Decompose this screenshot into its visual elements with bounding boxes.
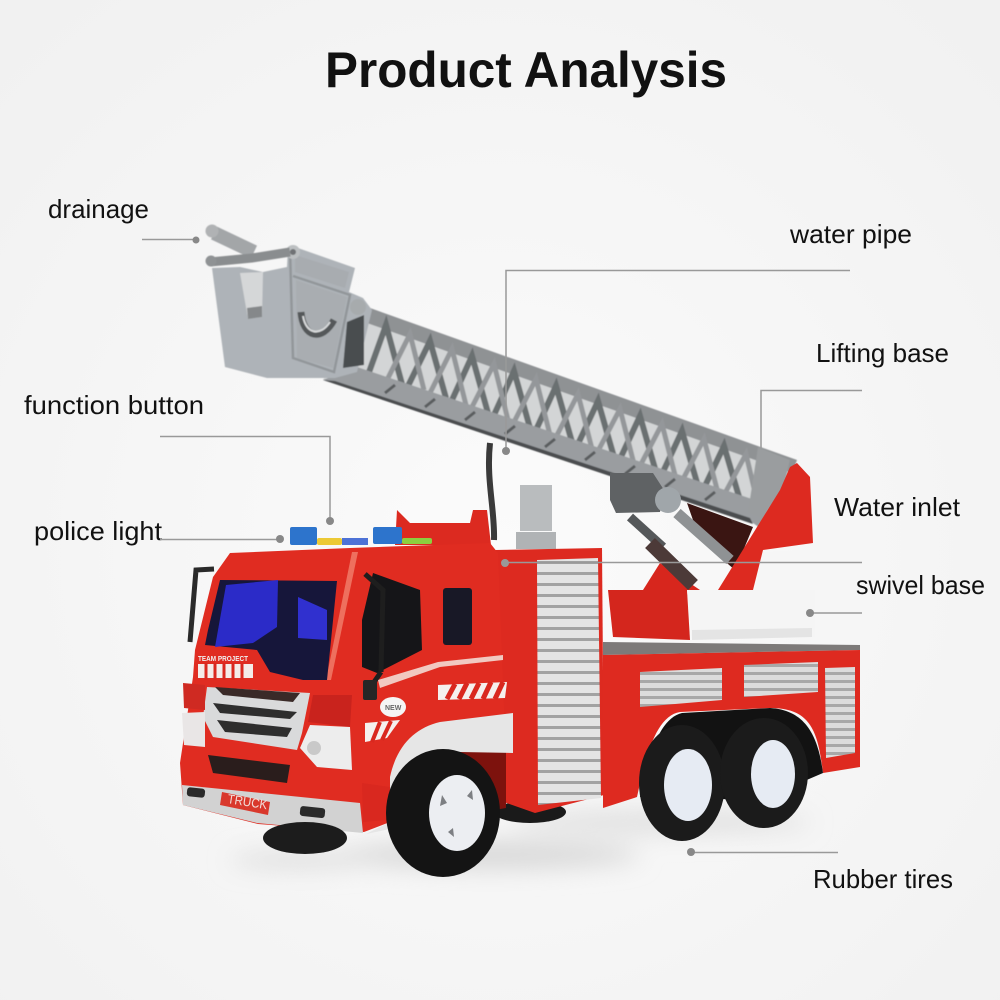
hazard stripes [438, 682, 507, 700]
front hazard [365, 720, 400, 742]
label: Rubber tires: Rubber tires [813, 864, 953, 894]
lights [183, 683, 205, 710]
label: Water inlet [501, 492, 961, 567]
basket [212, 245, 372, 378]
front tires [263, 749, 500, 877]
label: police light: police light [34, 516, 163, 546]
water hose [489, 443, 494, 540]
door window [362, 573, 422, 673]
new badge: NEW [385, 705, 402, 712]
silver pipe [516, 485, 556, 549]
team project badge [198, 656, 253, 680]
team project badge: TEAM PROJECT [198, 656, 249, 663]
label: function button: function button [24, 390, 204, 420]
roof marker [395, 510, 491, 545]
door stripe [378, 655, 503, 688]
lift cylinders [630, 517, 663, 547]
label: Rubber tires [687, 848, 953, 894]
grille [203, 687, 310, 750]
title: Product Analysis [325, 42, 727, 98]
label: Lifting base: Lifting base [816, 338, 949, 368]
label: Water inlet: Water inlet [834, 492, 961, 522]
basket crescent [301, 312, 334, 334]
ladder arm [206, 224, 797, 528]
label: function button [24, 390, 334, 525]
wheel arch [366, 713, 513, 834]
police light bar [290, 527, 432, 545]
mirror [365, 574, 383, 685]
label: water pipe: water pipe [789, 219, 912, 249]
rear tires [494, 718, 808, 841]
bumper [182, 785, 363, 833]
label: police light [34, 516, 284, 546]
label: water pipe [502, 219, 912, 455]
ladder truss [323, 308, 797, 528]
truck label: TRUCK [227, 791, 269, 812]
rear window [443, 588, 472, 645]
lower vent [208, 755, 290, 783]
ladder end bracket [748, 447, 790, 518]
lift arm and swivel base [608, 463, 830, 640]
label: swivel base: swivel base [856, 570, 985, 600]
under-arch shadow [400, 752, 506, 827]
label: swivel base [806, 570, 985, 617]
ground shadow [230, 810, 810, 869]
water nozzle [206, 224, 290, 266]
side mirror front [190, 569, 214, 642]
label: drainage [48, 194, 200, 244]
label: Lifting base [761, 338, 949, 448]
windscreen [205, 580, 337, 680]
cab [180, 510, 513, 834]
new badge [380, 697, 406, 717]
label: drainage: drainage [48, 194, 149, 224]
truck body tower [495, 548, 604, 813]
truck rear bed [603, 642, 860, 808]
